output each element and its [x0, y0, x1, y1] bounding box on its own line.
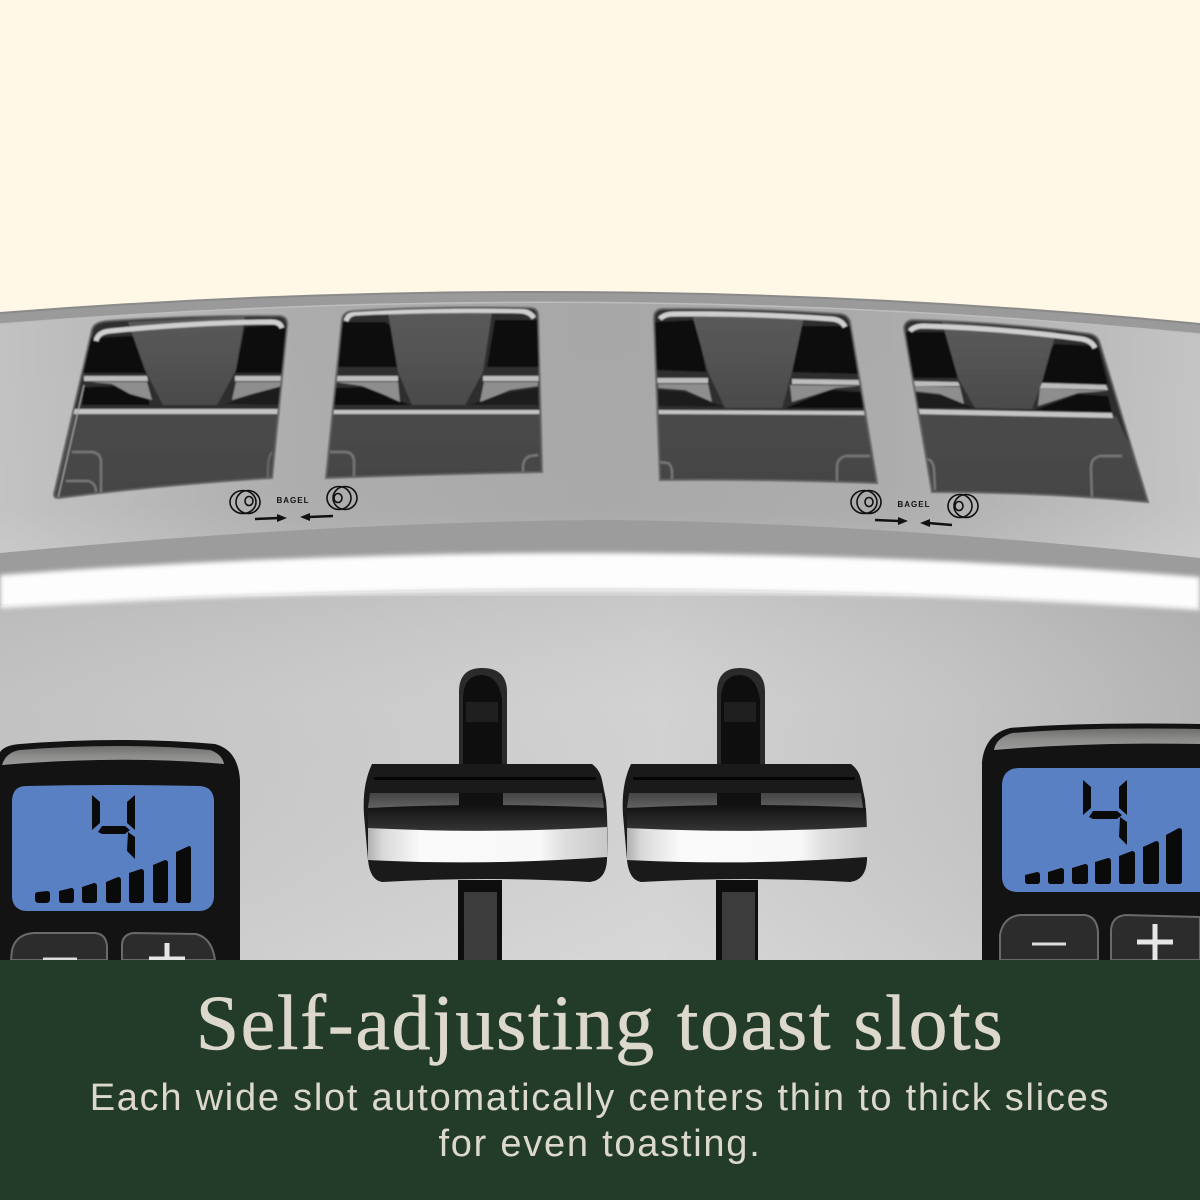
toaster front panel [0, 520, 1200, 960]
right buttons [1000, 915, 1200, 960]
subheading text [90, 1077, 1110, 1165]
bagel marking right: BAGEL [898, 500, 930, 509]
slot 2 [320, 300, 550, 485]
subheading text: Each wide slot automatically centers thin to thick slices [90, 1077, 1110, 1119]
right control panel [982, 724, 1200, 960]
subheading text: for even toasting. [438, 1123, 762, 1165]
right lever [623, 668, 867, 960]
left LCD display [12, 785, 214, 911]
bagel marking left [230, 486, 357, 522]
left control panel [0, 740, 240, 960]
slot 4 [902, 318, 1150, 504]
heading: Self-adjusting toast slots [196, 979, 1004, 1066]
right LCD display [1002, 768, 1200, 892]
toaster product illustration [0, 291, 1200, 960]
left lever [364, 668, 607, 960]
slot 1 [50, 310, 290, 500]
caption band [0, 960, 1200, 1200]
slot 3 [650, 300, 885, 490]
left buttons [11, 933, 215, 960]
bagel marking left: BAGEL [276, 496, 310, 505]
toaster top plate [0, 292, 1200, 600]
bagel marking right [851, 490, 978, 527]
